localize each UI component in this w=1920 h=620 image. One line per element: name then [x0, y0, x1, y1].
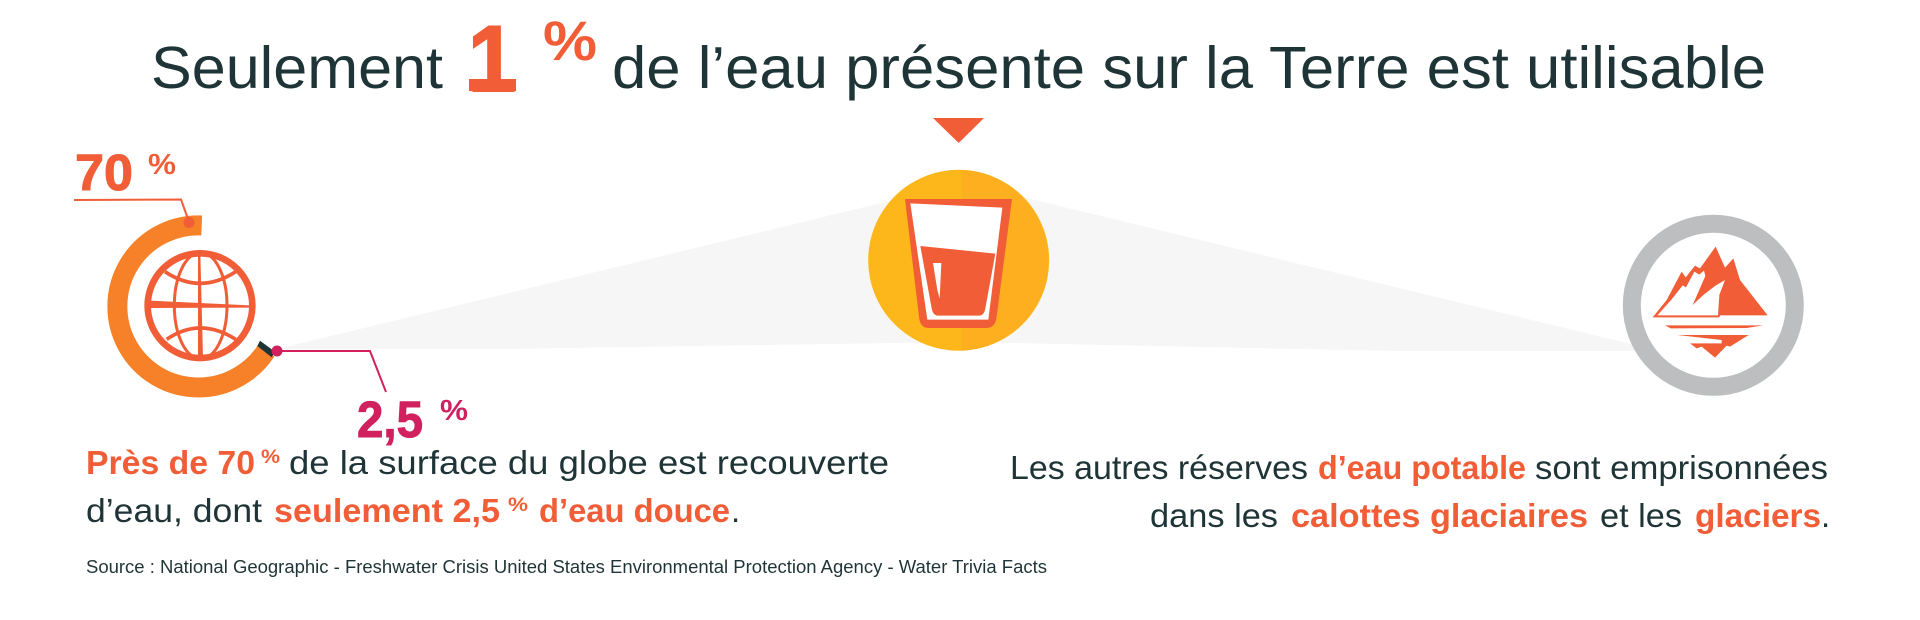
text block: right explanation: d’eau potable — [1318, 449, 1526, 486]
text block: left explanation: . — [731, 492, 740, 529]
callout: 2,5 percent: 2,5 — [357, 391, 423, 448]
icon: glass of water in yellow circle — [868, 170, 1049, 351]
text block: left explanation: d’eau, dont — [86, 492, 262, 529]
callout: 2,5 percent: % — [440, 395, 468, 427]
dark 2.5 percent segment — [257, 341, 275, 357]
icon: iceberg in grey ring — [1632, 224, 1795, 387]
callout: 70 percent: % — [148, 149, 176, 181]
text block: right explanation: dans les — [1150, 497, 1278, 534]
text block: right explanation: . — [1821, 497, 1830, 534]
title: Seulement — [151, 35, 443, 101]
text block: left explanation: de la surface du globe est recouverte — [289, 444, 889, 481]
text block: right explanation: calottes glaciaires — [1291, 497, 1588, 534]
icon: globe — [148, 252, 252, 359]
text block: right explanation: glaciers — [1695, 497, 1821, 534]
text block: right explanation — [1010, 449, 1830, 534]
title: % — [543, 9, 597, 72]
callout: 70 percent — [74, 144, 194, 228]
text block: right explanation: sont emprisonnées — [1535, 449, 1828, 486]
text block: right explanation: et les — [1600, 497, 1682, 534]
light grey beam from globe to glass to glacier — [277, 182, 1660, 351]
text block: left explanation — [86, 444, 889, 529]
title — [151, 6, 1766, 111]
title: 1 — [468, 6, 516, 111]
text block: left explanation: d’eau douce — [539, 492, 730, 529]
title: de l’eau présente sur la Terre est utilisable — [612, 35, 1766, 101]
callout: 70 percent: 70 — [75, 144, 133, 201]
text block: left explanation: seulement 2,5 — [274, 492, 500, 529]
text block: right explanation: Les autres réserves — [1010, 449, 1308, 486]
arrow pointing down to glass — [933, 118, 984, 143]
text block: left explanation: % — [508, 495, 528, 516]
orange ring — [117, 225, 266, 387]
text block: left explanation: % — [261, 447, 280, 468]
text block: left explanation: Près de 70 — [86, 444, 255, 481]
donut: 70 percent water ring with globe — [117, 225, 275, 387]
callout: 2,5 percent — [272, 346, 468, 448]
source note: Source : National Geographic - Freshwater Crisis United States Environmental Protection Agency - Water Trivia Facts — [86, 557, 1047, 577]
